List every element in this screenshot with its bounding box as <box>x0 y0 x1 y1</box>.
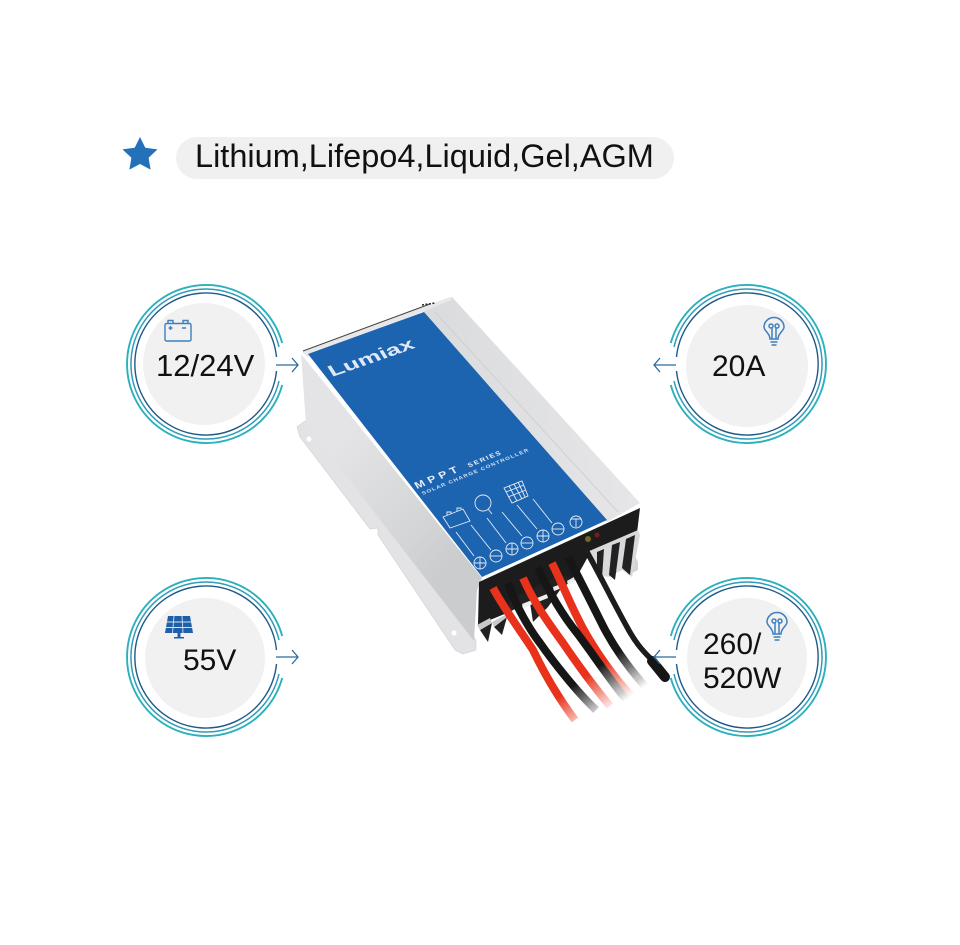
icon: star <box>122 137 158 170</box>
callout: rated current 20A <box>654 285 826 443</box>
callout: PV power 260/520W <box>654 578 826 736</box>
callout: PV voltage 55V <box>127 578 298 736</box>
callout: system voltage 12/24V: 12/24V <box>156 348 255 383</box>
icon: light bulb <box>767 612 787 640</box>
callout: PV power 260/520W: 520W <box>703 662 782 695</box>
blue front panel <box>308 312 607 577</box>
callout: rated current 20A: 20A <box>712 350 765 383</box>
heat sink fins <box>480 535 635 642</box>
rear flange <box>618 545 638 575</box>
lit fin base <box>587 530 640 577</box>
end cap <box>478 508 640 625</box>
product descriptor: SOLAR CHARGE CONTROLLER <box>421 448 531 497</box>
battery types pill: Lithium,Lifepo4,Liquid,Gel,AGM <box>195 138 654 174</box>
icon: solar panel <box>165 616 193 638</box>
series label: MPPT SERIES <box>413 447 504 491</box>
top silver strip <box>422 297 640 522</box>
temperature probe <box>652 661 665 677</box>
callout: PV voltage 55V: 55V <box>183 644 236 677</box>
top edge <box>302 297 452 357</box>
icon: battery <box>165 320 191 341</box>
product: solar charge controller <box>297 297 665 720</box>
icon: light bulb <box>764 318 784 345</box>
mounting flange <box>297 421 476 654</box>
side face <box>301 354 482 641</box>
callout: system voltage 12/24V <box>127 285 298 443</box>
temperature sensor wire <box>587 552 650 658</box>
callout: PV power 260/520W: 260/ <box>703 628 762 661</box>
brand name: Lumiax <box>324 334 418 380</box>
indicator LEDs <box>585 536 591 542</box>
cables <box>493 557 650 720</box>
terminal diagram <box>443 481 582 569</box>
